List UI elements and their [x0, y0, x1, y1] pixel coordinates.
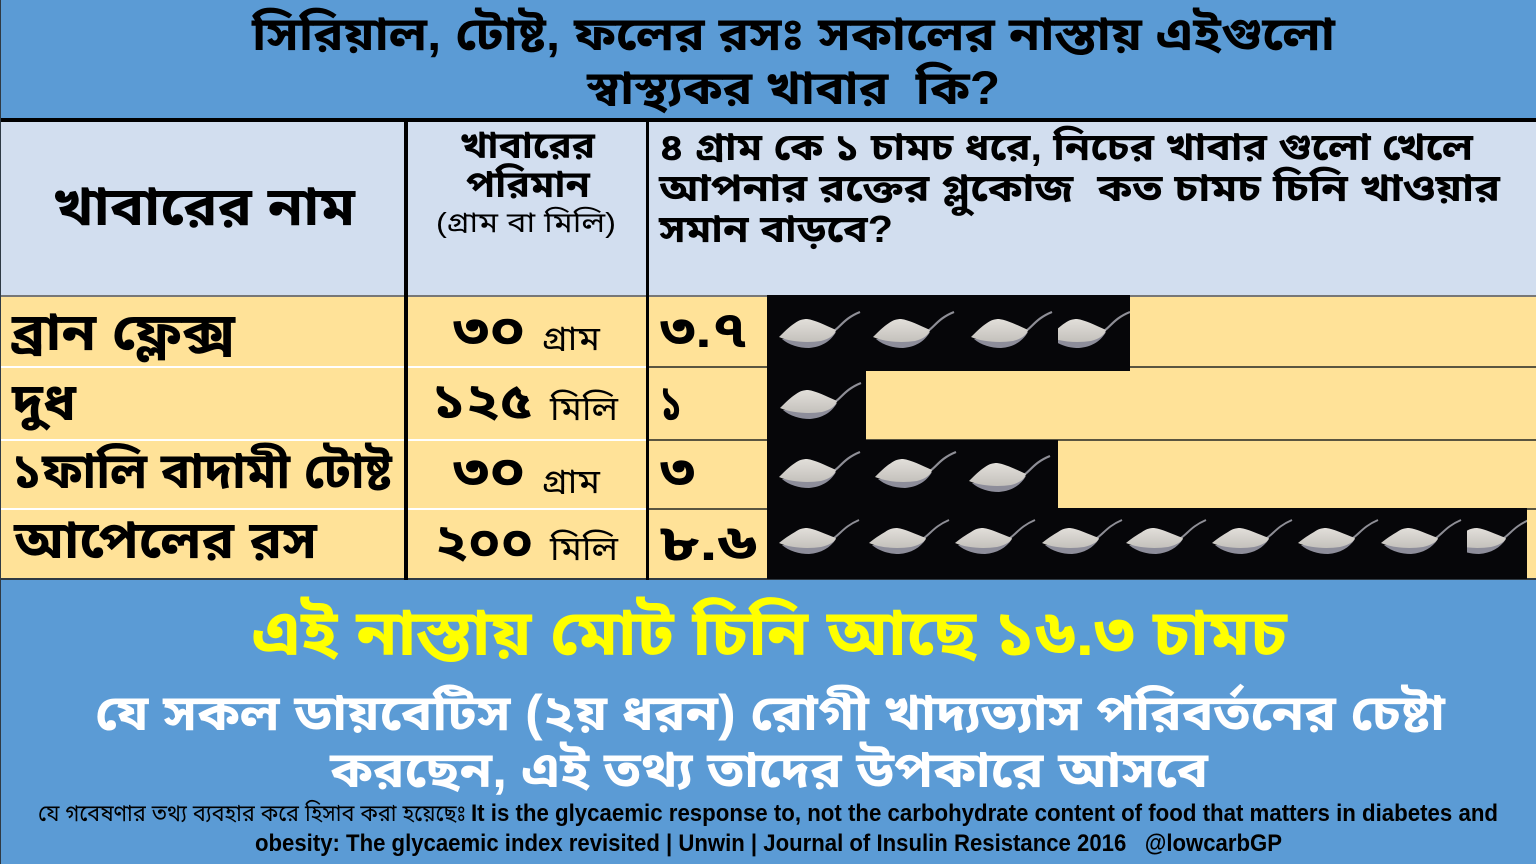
- row: apple juice: মিলি: [549, 529, 619, 568]
- page left edge line: [0, 0, 1, 864]
- heading: sugar question: ৪ গ্রাম কে ১ চামচ ধরে, নিচের খাবার গুলো খেলে: [659, 125, 1474, 169]
- title: স্বাস্থ্যকর খাবার কি?: [586, 60, 1000, 114]
- row: brown toast: ৩: [660, 443, 695, 499]
- title: [251, 6, 1336, 114]
- callout: total sugar: এই নাস্তায় মোট চিনি আছে ১৬.৩ চামচ: [252, 596, 1289, 669]
- panel: table rows background: [0, 295, 1536, 580]
- row: milk: ১: [660, 375, 682, 431]
- panel: table header: [0, 118, 1536, 296]
- row: brown toast: ১ফালি বাদামী টোষ্ট: [12, 442, 393, 499]
- heading: food quantity: খাবারের: [460, 125, 596, 166]
- row: apple juice: আপেলের রস: [13, 512, 319, 570]
- heading: food name: খাবারের নাম: [53, 177, 356, 237]
- pictogram: apple juice 8.6 spoons: [767, 508, 1529, 579]
- heading: sugar question: আপনার রক্তের গ্লুকোজ কত চামচ চিনি খাওয়ার: [658, 166, 1501, 216]
- text block: who benefits: যে সকল ডায়বেটিস (২য় ধরন) রোগী খাদ্যভ্যাস পরিবর্তনের চেষ্টা: [95, 683, 1446, 741]
- row: brown toast: [12, 442, 695, 501]
- pictogram: milk 1 spoon: [767, 371, 866, 440]
- panel: bottom summary: [0, 580, 1536, 864]
- row: milk: [11, 373, 682, 432]
- row: milk: দুধ: [11, 374, 78, 432]
- row: apple juice: ২০০: [435, 514, 533, 570]
- row: brown toast: ৩০: [453, 443, 525, 499]
- text block: who benefits: [95, 683, 1446, 798]
- text block: source citation: [38, 800, 1498, 857]
- text block: source citation: যে গবেষণার তথ্য ব্যবহার করে হিসাব করা হয়েছেঃ: [38, 800, 466, 826]
- row: apple juice: ৮.৬: [660, 515, 757, 571]
- row: milk: ১২৫: [432, 373, 533, 429]
- heading: sugar question: সমান বাড়বে?: [658, 209, 893, 251]
- table column dividers: [404, 122, 649, 580]
- row: bran flakes: [11, 302, 747, 363]
- row: apple juice: [13, 512, 757, 571]
- text block: who benefits: করছেন, এই তথ্য তাদের উপকারে আসবে: [329, 741, 1209, 798]
- heading: sugar question: [658, 125, 1501, 251]
- title: সিরিয়াল, টোষ্ট, ফলের রসঃ সকালের নাস্তায় এইগুলো: [251, 6, 1336, 60]
- heading: food quantity: পরিমান: [466, 164, 591, 205]
- row: bran flakes: ৩.৭: [660, 302, 747, 358]
- row: brown toast: গ্রাম: [542, 463, 601, 501]
- heading: food quantity: [436, 125, 616, 238]
- pictogram: bran flakes 3.7 spoons: [767, 295, 1130, 371]
- row: milk: মিলি: [549, 389, 619, 428]
- row: bran flakes: ৩০: [453, 302, 525, 358]
- text block: source citation: obesity: The glycaemic index revisited | Unwin | Journal of Insulin Resistance 2016 @lowcarbGP: [255, 830, 1282, 857]
- pictogram: toast 3 spoons: [767, 440, 1058, 508]
- heading: food quantity: (গ্রাম বা মিলি): [436, 206, 616, 238]
- row: bran flakes: গ্রাম: [542, 320, 601, 358]
- row: bran flakes: ব্রান ফ্লেক্স: [11, 304, 237, 363]
